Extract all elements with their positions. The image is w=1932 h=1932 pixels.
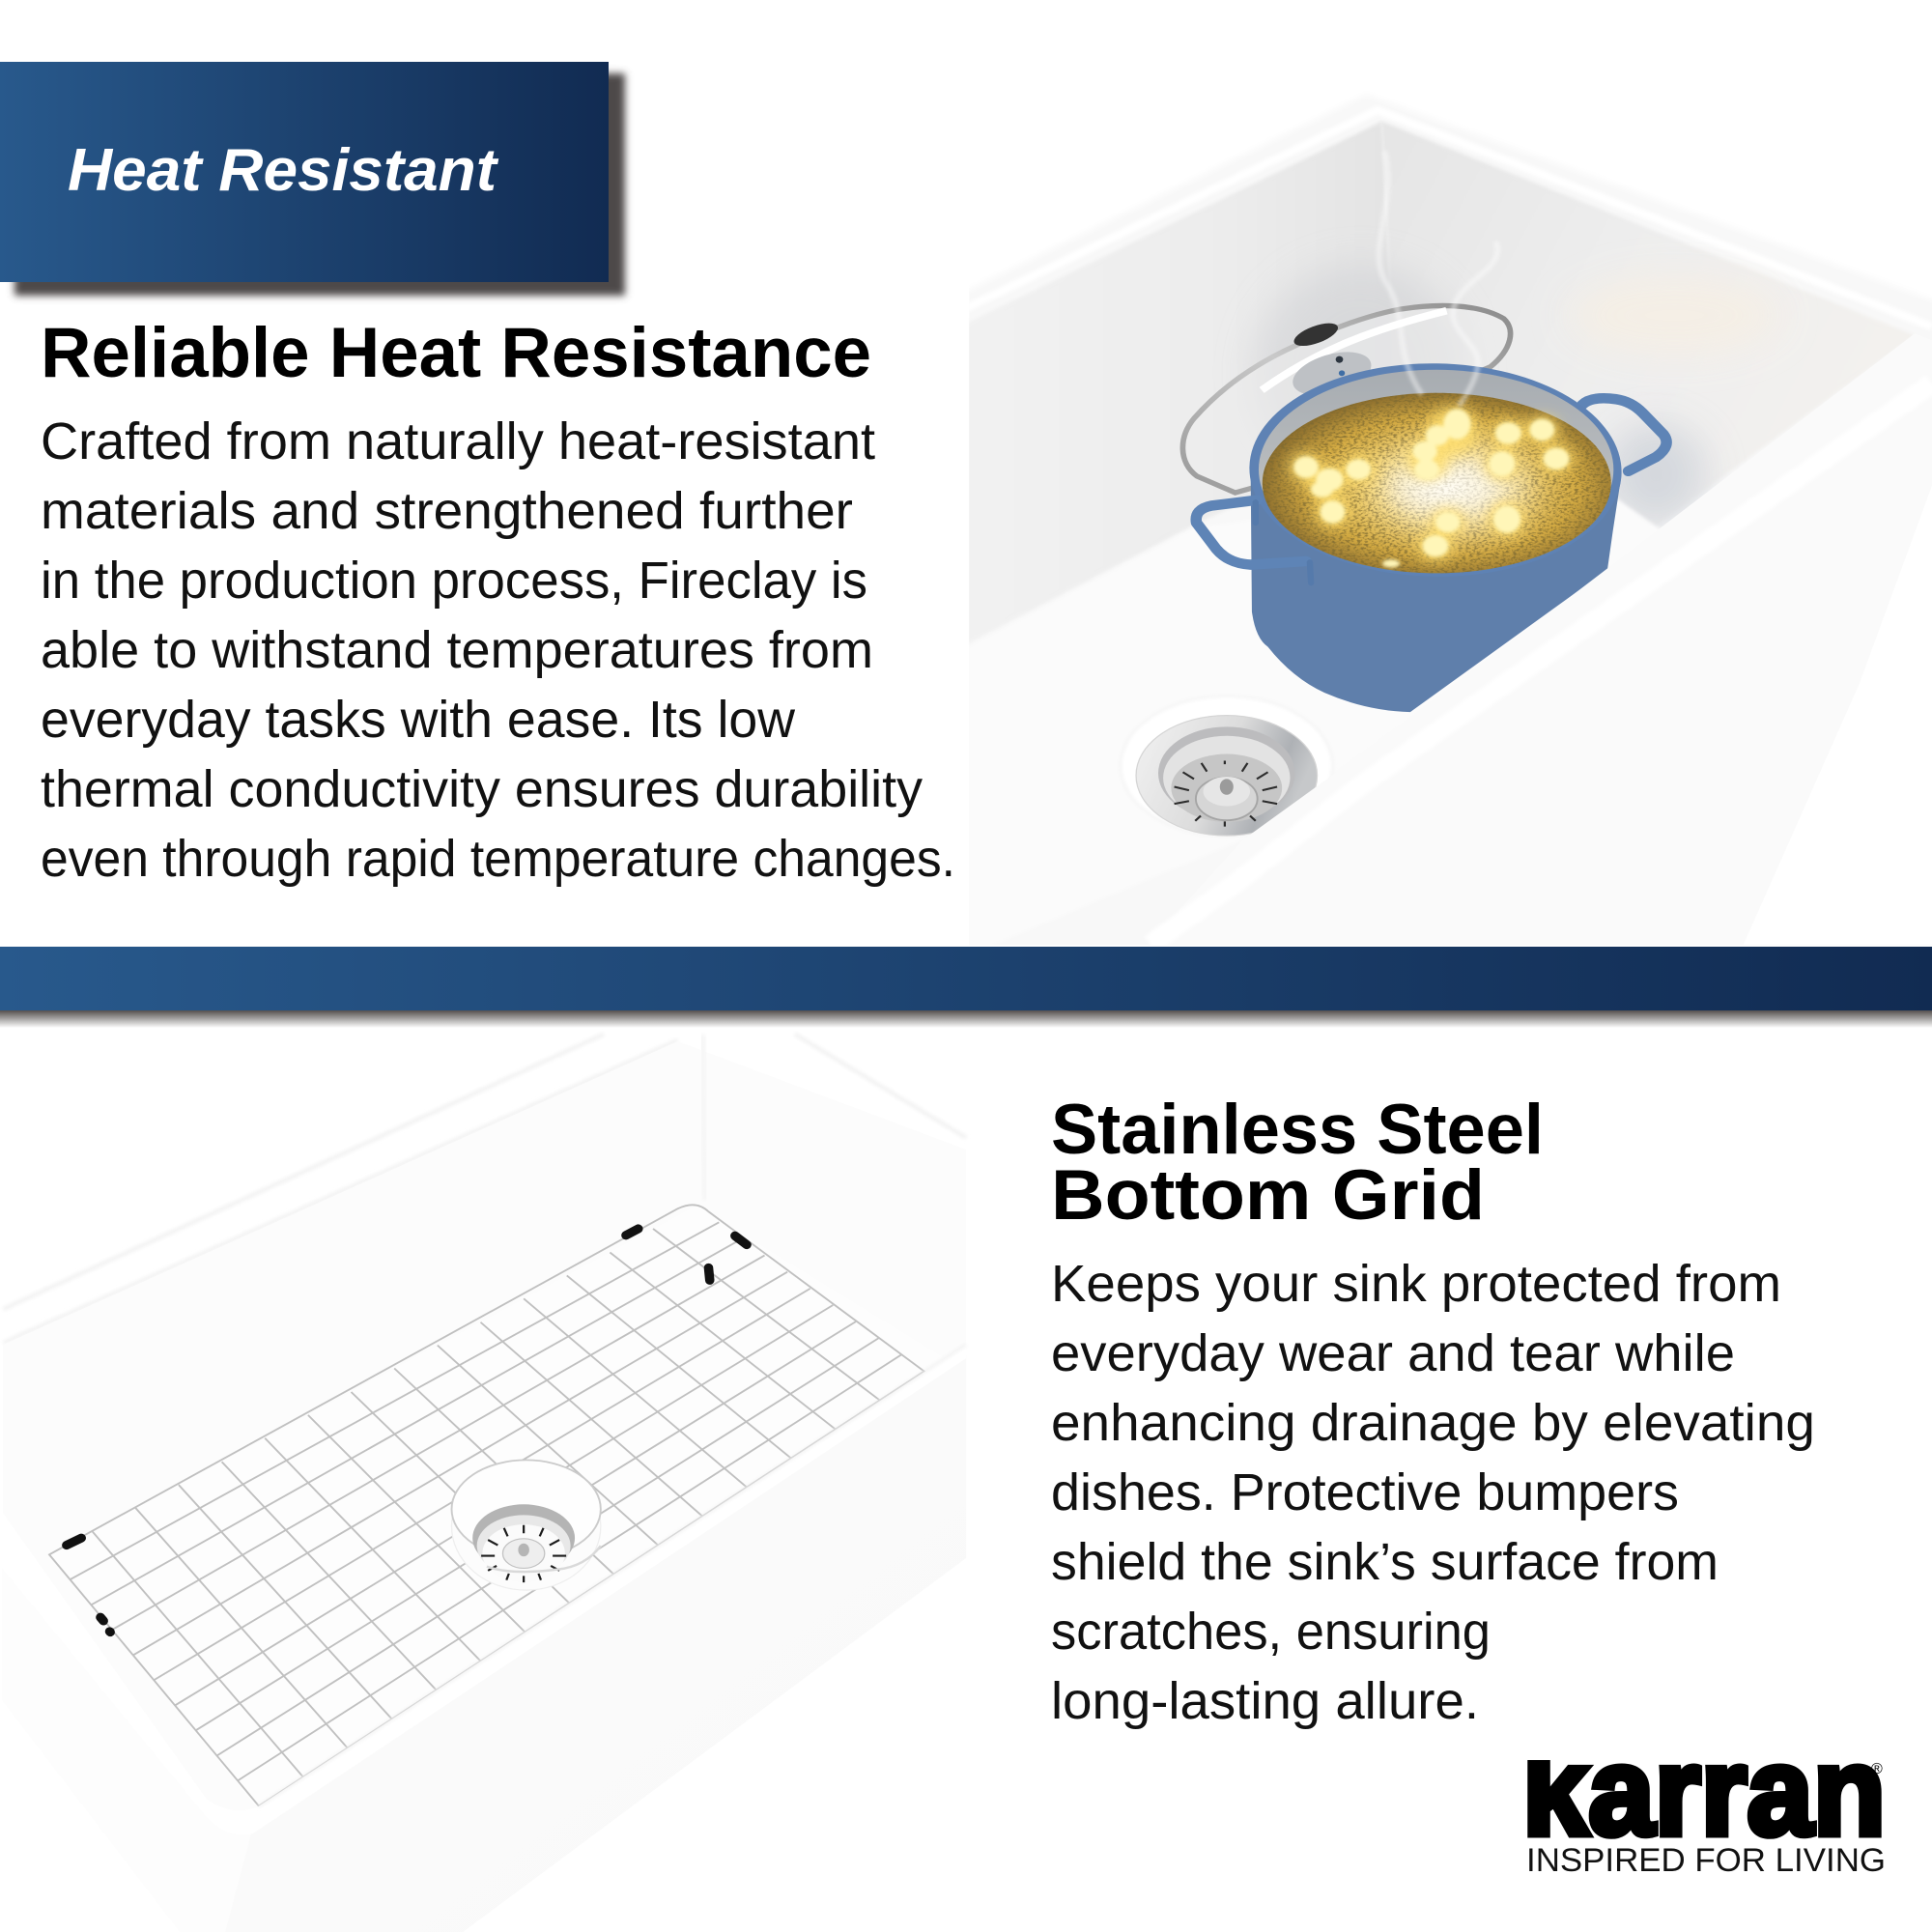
- sink floor: [1614, 498, 1659, 539]
- floating dumplings: [1293, 409, 1569, 567]
- divider band: [0, 947, 1932, 1010]
- warm glow on wall: [1627, 302, 1729, 328]
- glass pot lid: [1182, 305, 1511, 493]
- sink basin: [3, 1041, 966, 1818]
- body text: bottom grid: shield the sink’s surface from: [1051, 1533, 1719, 1591]
- steam: [1378, 154, 1482, 408]
- image: sink with boiling pot: [969, 120, 1915, 837]
- heading: stainless steel bottom grid: Bottom Grid: [1051, 1156, 1485, 1235]
- sink floor: [49, 1206, 966, 1818]
- image: sink with stainless steel bottom grid: [2, 1035, 966, 1932]
- divider band shadow: [0, 1010, 1932, 1028]
- pot body: [1251, 474, 1622, 712]
- body text: bottom grid: enhancing drainage by elevating: [1051, 1394, 1815, 1452]
- rim highlight: [1151, 384, 1932, 945]
- sink apron side: [1744, 485, 1932, 945]
- body text: heat resistance: Crafted from naturally heat-resistant: [41, 412, 875, 470]
- basin corner: [702, 1035, 705, 1200]
- lid underside disc: [1293, 352, 1372, 394]
- pot shadow on wall: [1606, 423, 1705, 525]
- left pot handle: [1196, 500, 1311, 582]
- body text: heat resistance: materials and strengthened further: [41, 482, 853, 540]
- body text: heat resistance: [41, 412, 955, 888]
- body text: bottom grid: scratches, ensuring: [1051, 1603, 1491, 1661]
- sink rim edge: [3, 1035, 966, 1343]
- sink right wall: [1383, 123, 1910, 478]
- drain: [1136, 715, 1318, 837]
- drain: [472, 1504, 601, 1582]
- lid knob: [1294, 323, 1338, 346]
- rim inner highlight: [953, 110, 1932, 327]
- pot rim: [1247, 360, 1624, 580]
- body text: bottom grid: everyday wear and tear while: [1051, 1324, 1735, 1382]
- lid screw: [1336, 356, 1343, 363]
- heading: stainless steel bottom grid: Stainless Steel: [1051, 1091, 1544, 1169]
- sink left face: [2, 1568, 251, 1932]
- surface texture: [1263, 393, 1611, 573]
- black bumpers: [67, 1229, 747, 1633]
- bottom grid wires: [49, 1205, 924, 1806]
- body text: bottom grid: [1051, 1255, 1815, 1730]
- logo wordmark: karran: [1522, 1720, 1886, 1861]
- sink front rim: [1251, 336, 1912, 835]
- rim inner edge: [258, 1345, 966, 1806]
- registered mark: ®: [1871, 1761, 1883, 1777]
- body text: heat resistance: thermal conductivity ensures durability: [41, 760, 923, 818]
- banner title: Heat Resistant: [68, 137, 498, 204]
- body text: heat resistance: even through rapid temperature changes.: [41, 830, 955, 888]
- body text: heat resistance: everyday tasks with ease. Its low: [41, 691, 796, 749]
- body text: bottom grid: long-lasting allure.: [1051, 1672, 1479, 1730]
- grid drain cutout: [452, 1463, 601, 1590]
- wall shadow behind pot: [1256, 269, 1437, 362]
- heading: reliable heat resistance: Reliable Heat Resistance: [41, 314, 871, 392]
- steam haze: [1382, 453, 1523, 524]
- pot interior: [1259, 369, 1613, 491]
- sink left wall: [1049, 123, 1388, 596]
- body text: bottom grid: dishes. Protective bumpers: [1051, 1463, 1679, 1521]
- banner: [0, 62, 609, 282]
- dumpling glow: [1290, 408, 1573, 560]
- banner shadow: [14, 73, 625, 296]
- sink front rim: [2, 1345, 966, 1835]
- body text: bottom grid: Keeps your sink protected from: [1051, 1255, 1781, 1313]
- sink rim: [953, 95, 1932, 961]
- sink front apron: [225, 1355, 966, 1932]
- logo tagline: INSPIRED FOR LIVING: [1526, 1842, 1886, 1879]
- heading: stainless steel bottom grid: [1051, 1091, 1544, 1235]
- drain wire loop: [452, 1460, 601, 1558]
- body text: heat resistance: in the production process, Fireclay is: [41, 552, 867, 610]
- body text: heat resistance: able to withstand temperatures from: [41, 621, 873, 679]
- logo: karran: [1527, 1760, 1884, 1872]
- lid highlight: [1262, 311, 1446, 390]
- boiling surface: [1263, 393, 1611, 573]
- right pot handle: [1582, 398, 1666, 471]
